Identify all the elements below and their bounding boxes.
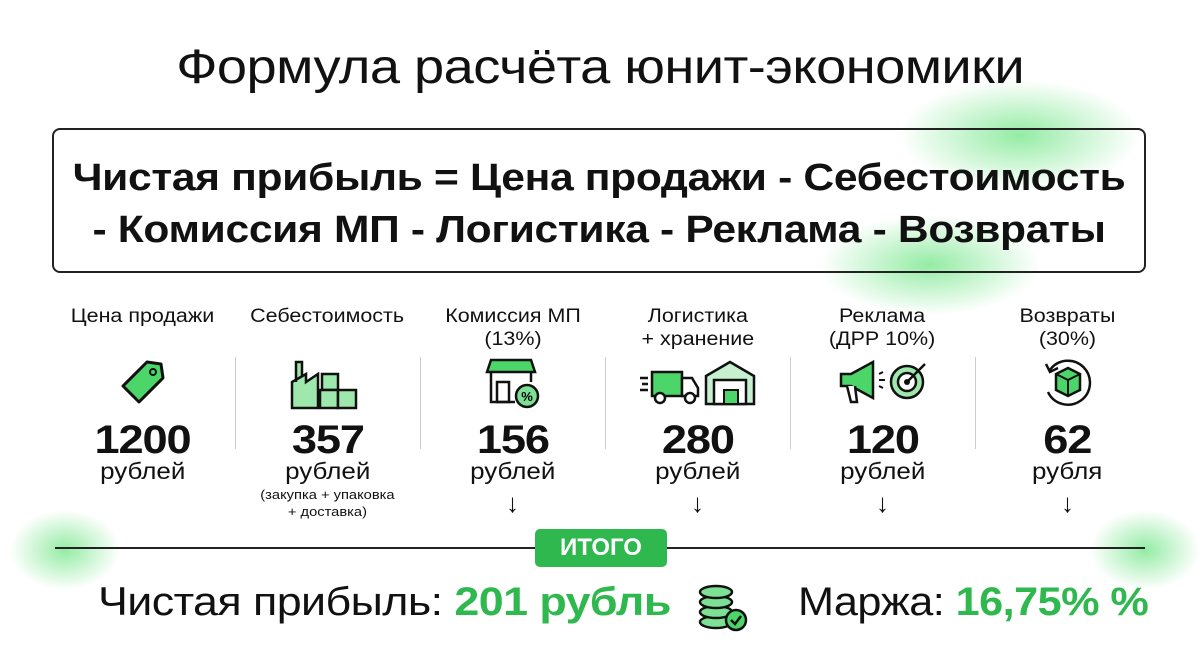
column: cost: Себестоимость [251,306,404,327]
column: cost: (закупка + упаковка [260,487,395,502]
badge: ИТОГО [535,529,667,567]
icon: shop percent: % [521,389,533,404]
title: Формула расчёта юнит-экономики [176,41,1024,94]
net profit: Чистая прибыль: 201 рубль [98,580,671,624]
column: returns: рубля [1032,458,1103,484]
column: ads: Реклама [839,306,926,327]
column: price: рублей [100,458,185,484]
icon: truck warehouse [640,360,756,406]
column: ads: ↓ [876,488,889,518]
column: commission: 156 [476,418,549,462]
column: returns [1020,306,1115,518]
column: commission: ↓ [506,488,519,518]
column: ads: 120 [846,418,919,462]
column: price [71,306,214,484]
column: cost [251,306,404,519]
column: logistics: рублей [655,458,740,484]
badge: ИТОГО: ИТОГО [560,534,642,561]
column: returns: Возвраты [1020,306,1115,327]
total line [55,547,1145,549]
icon: megaphone target [840,360,926,404]
column: commission: (13%) [484,329,541,350]
column: logistics: ↓ [691,488,704,518]
column: logistics [640,306,756,518]
column: returns: 62 [1043,418,1092,462]
column: logistics: 280 [661,418,734,462]
icon: coins [698,584,748,632]
icon: factory [290,360,358,410]
column: price: 1200 [94,418,191,462]
column: cost: рублей [285,458,370,484]
icon: tag [121,360,164,404]
icon: return box [1044,360,1092,406]
column: ads: рублей [840,458,925,484]
icon: shop percent [485,358,540,408]
column: cost: 357 [291,418,364,462]
column: commission: Комиссия МП [445,306,580,327]
column: commission [445,306,580,518]
formula box: - Комиссия МП - Логистика - Реклама - Возвраты [92,209,1106,251]
formula box: Чистая прибыль = Цена продажи - Себестоимость [73,157,1125,199]
column: price: Цена продажи [71,306,214,327]
column: returns: ↓ [1061,488,1074,518]
column: cost: + доставка) [288,504,367,519]
formula box [52,128,1146,273]
column: returns: (30%) [1039,329,1096,350]
column: ads [829,306,936,518]
margin: Маржа: 16,75% % [798,580,1148,624]
column: ads: (ДРР 10%) [829,329,936,350]
column: logistics: Логистика [647,306,748,327]
column: logistics: + хранение [641,329,754,350]
column: commission: рублей [470,458,555,484]
